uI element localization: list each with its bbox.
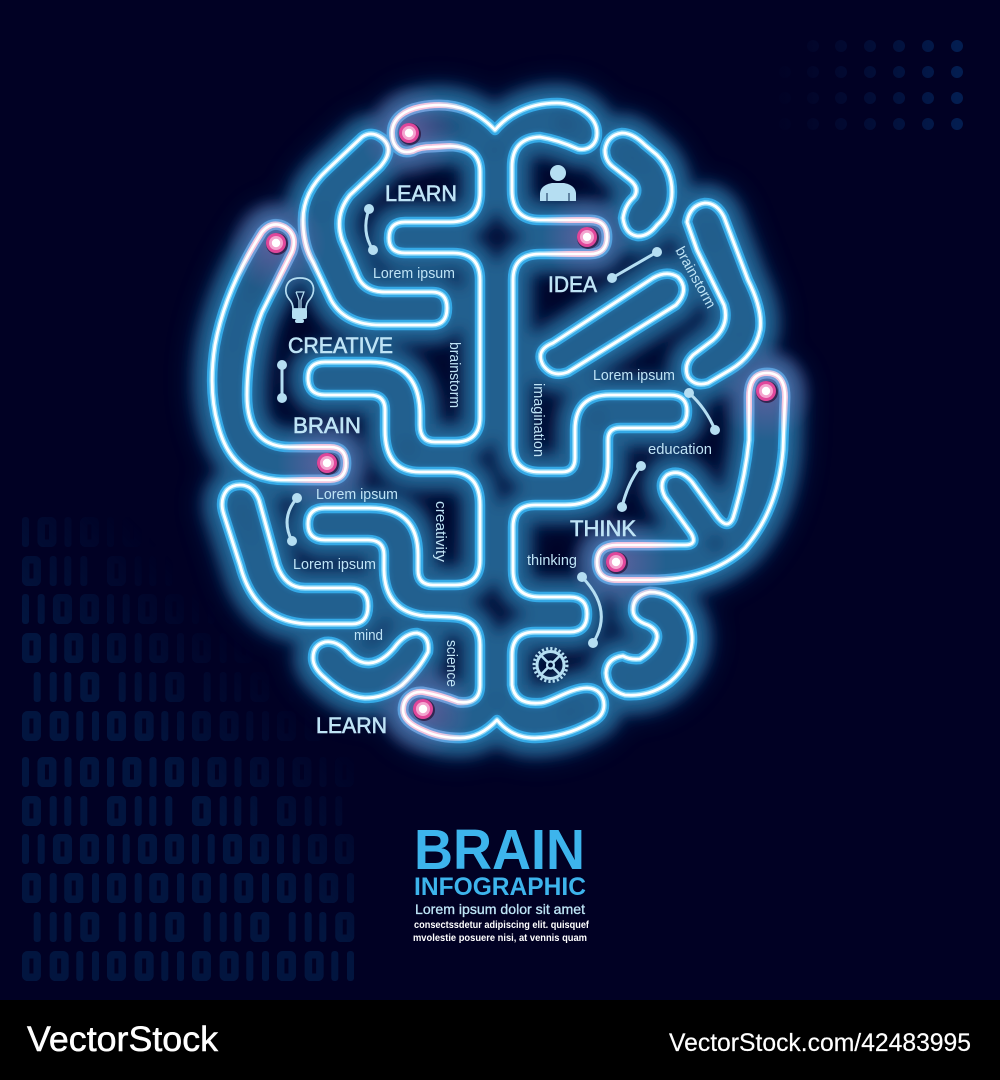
body line 2: mvolestie posuere nisi, at vennis quam: [413, 932, 587, 944]
heading: LEARN bottom: LEARN: [316, 713, 387, 738]
heading: IDEA: IDEA: [548, 272, 597, 297]
title: BRAIN: BRAIN: [414, 818, 585, 882]
faint outer glow: [212, 103, 785, 738]
binary code pattern: [22, 517, 356, 983]
label: imagination: imagination: [530, 383, 546, 457]
label: brainstorm vertical: brainstorm: [446, 342, 462, 408]
banner logo text: VectorStock: [27, 1020, 219, 1059]
dot grid decoration: [779, 40, 963, 130]
brain: neon outline: [212, 83, 816, 759]
body line 1: consectssdetur adipiscing elit. quisquef: [414, 919, 589, 931]
icon: gear: [534, 648, 567, 682]
heading: BRAIN: BRAIN: [293, 413, 361, 438]
label: Lorem ipsum right: Lorem ipsum: [593, 368, 675, 384]
label: thinking: thinking: [527, 553, 577, 569]
neon tube: white core: [212, 103, 785, 738]
pink node dots: [266, 123, 778, 721]
heading: CREATIVE: CREATIVE: [288, 333, 393, 358]
purple dot halos: [226, 83, 816, 759]
neon tube soft edge: [212, 103, 785, 738]
pink tube sections near dots: [212, 103, 785, 738]
subtitle: INFOGRAPHIC: INFOGRAPHIC: [414, 873, 586, 901]
label: Lorem ipsum left upper: Lorem ipsum: [316, 487, 398, 503]
banner url text: VectorStock.com/42483995: [669, 1029, 971, 1057]
heading: THINK: THINK: [570, 516, 636, 541]
main tube glow acting as the lobe fill: [212, 103, 785, 738]
label: creativity: creativity: [432, 501, 448, 563]
neon tube: light band: [212, 103, 785, 738]
label: education: education: [648, 442, 712, 458]
icon: person: [540, 165, 576, 201]
connector lines: [277, 204, 720, 648]
icon: light bulb: [286, 278, 314, 323]
label: science: science: [443, 640, 459, 687]
neon tube: cyan edge: [212, 103, 785, 738]
brain labels: [288, 181, 718, 738]
label: brainstorm diagonal: brainstorm: [672, 244, 718, 311]
label: Lorem ipsum left lower: Lorem ipsum: [293, 557, 376, 573]
label: Lorem ipsum top-left: Lorem ipsum: [373, 266, 455, 282]
watermark banner: [0, 1000, 1000, 1080]
title block: [413, 818, 589, 944]
heading: LEARN top: LEARN: [385, 181, 457, 206]
tagline: Lorem ipsum dolor sit amet: [415, 901, 585, 917]
label: mind: mind: [354, 628, 383, 644]
